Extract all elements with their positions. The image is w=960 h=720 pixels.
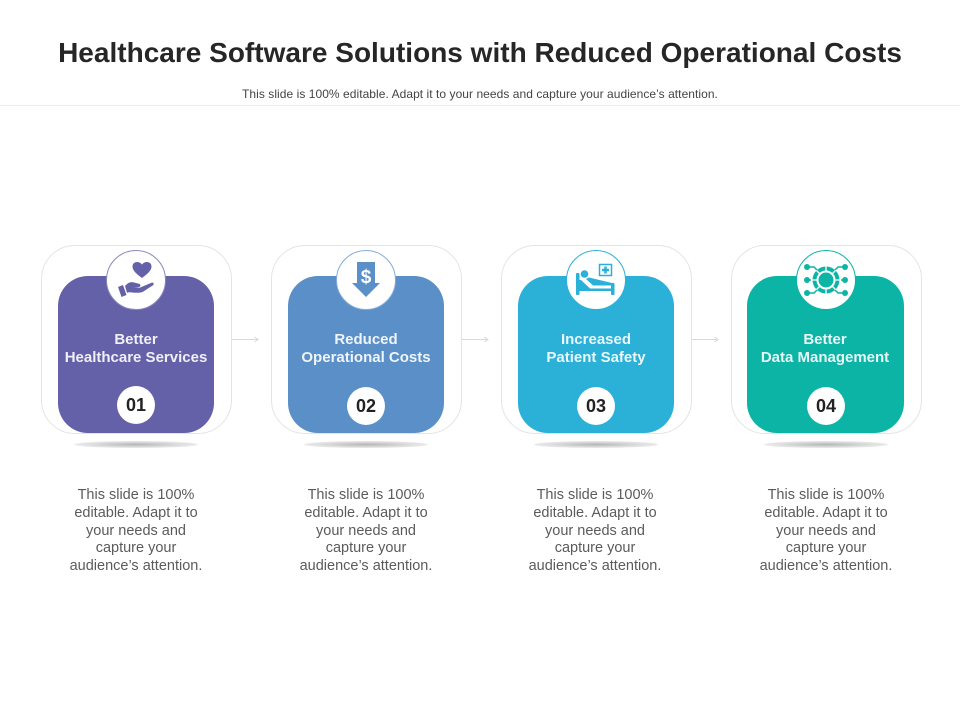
arrow 1 — [232, 336, 258, 342]
description 1: editable. Adapt it to — [74, 505, 198, 521]
label 4: Better — [803, 331, 847, 348]
number 03: 03 — [586, 396, 606, 416]
description 3: This slide is 100% — [537, 487, 653, 503]
description 3: your needs and — [545, 523, 645, 539]
outer card 2 — [271, 245, 462, 434]
outer card 1 — [41, 245, 232, 434]
shadow 2 — [304, 441, 428, 448]
inner card 4 — [747, 276, 904, 433]
description 3 — [529, 487, 661, 574]
icon: dollar down arrow: $ — [361, 267, 372, 288]
panel: step 2 — [271, 245, 462, 448]
outer card 4 — [731, 245, 922, 434]
shadow 3 — [534, 441, 658, 448]
description 4: your needs and — [776, 523, 876, 539]
description 1: This slide is 100% — [78, 487, 194, 503]
outer card 3 — [501, 245, 692, 434]
description 4: This slide is 100% — [768, 487, 884, 503]
description 1: capture your — [96, 540, 176, 556]
panel: step 1 — [41, 245, 232, 448]
description 2: editable. Adapt it to — [304, 505, 428, 521]
description 2: This slide is 100% — [308, 487, 424, 503]
title: Healthcare Software Solutions with Reduced Operational Costs — [58, 37, 902, 68]
number 03 — [577, 387, 615, 425]
label 3: Patient Safety — [546, 349, 646, 366]
label 2: Reduced — [334, 331, 398, 348]
icon: hospital bed — [566, 250, 626, 310]
icon: dollar down arrow — [336, 250, 396, 310]
description 3: editable. Adapt it to — [533, 505, 657, 521]
label 1: Better — [114, 331, 158, 348]
description 4: audience’s attention. — [760, 558, 892, 574]
description 2: audience’s attention. — [300, 558, 432, 574]
description 1: audience’s attention. — [70, 558, 202, 574]
inner card 1 — [58, 276, 214, 433]
arrow 2 — [462, 336, 488, 342]
panel: step 3 — [501, 245, 692, 448]
label 2 — [301, 331, 431, 366]
header rule — [0, 105, 960, 106]
label 2: Operational Costs — [301, 349, 431, 366]
icon: hand holding heart — [106, 250, 166, 310]
description 1 — [70, 487, 202, 574]
label 1 — [65, 331, 207, 366]
icon: data network — [796, 250, 856, 310]
description 4: capture your — [786, 540, 866, 556]
label 3: Increased — [561, 331, 631, 348]
description 2: your needs and — [316, 523, 416, 539]
number 02 — [347, 387, 385, 425]
number 04: 04 — [816, 396, 836, 416]
shadow 1 — [74, 441, 198, 448]
shadow 4 — [764, 441, 888, 448]
label 4: Data Management — [761, 349, 889, 366]
label 3 — [546, 331, 646, 366]
description 3: audience’s attention. — [529, 558, 661, 574]
number 02: 02 — [356, 396, 376, 416]
description 3: capture your — [555, 540, 635, 556]
description 4: editable. Adapt it to — [764, 505, 888, 521]
arrow 3 — [692, 336, 718, 342]
label 1: Healthcare Services — [65, 349, 207, 366]
description 1: your needs and — [86, 523, 186, 539]
number 04 — [807, 387, 845, 425]
description 2: capture your — [326, 540, 406, 556]
number 01: 01 — [126, 395, 146, 415]
number 01 — [117, 386, 155, 424]
inner card 3 — [518, 276, 674, 433]
subtitle: This slide is 100% editable. Adapt it to your needs and capture your audience’s attention. — [242, 87, 718, 101]
label 4 — [761, 331, 889, 366]
description 2 — [300, 487, 432, 574]
panel: step 4 — [731, 245, 922, 448]
inner card 2 — [288, 276, 444, 433]
description 4 — [760, 487, 892, 574]
